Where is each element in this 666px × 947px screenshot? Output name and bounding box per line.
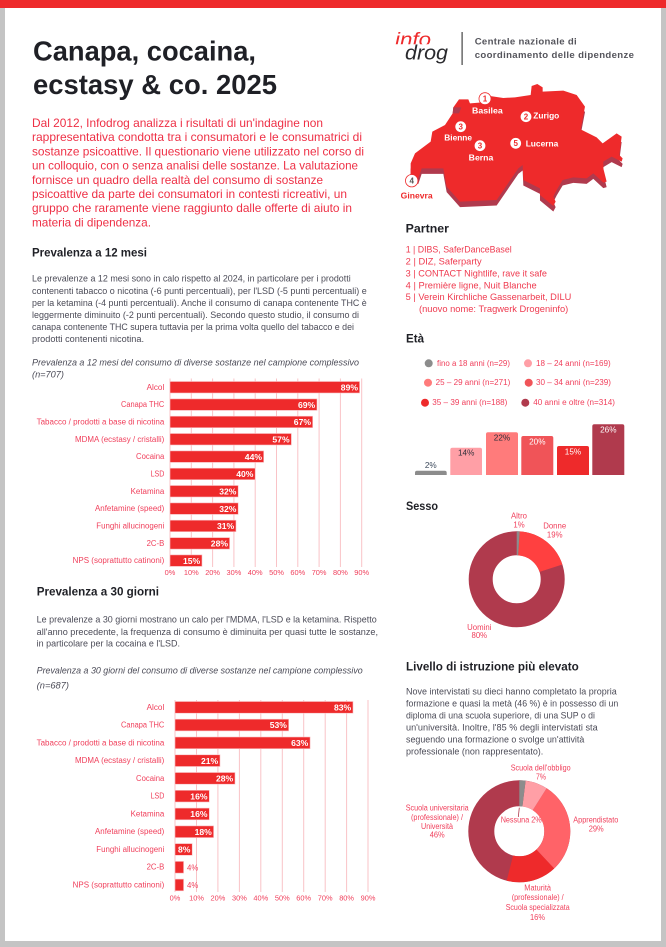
bar chart: 30 days: 16% (190, 809, 208, 819)
bar chart: 30 days: 80% (339, 894, 354, 903)
bar chart: 12 months: 28% (211, 539, 228, 549)
intro text: rappresentativa condotta tra i consumatori e le consumatrici di (32, 130, 362, 144)
donut chart: sex (467, 512, 566, 640)
bar chart: 30 days: 20% (211, 894, 226, 903)
bar chart: 12 months: MDMA (ecstasy / cristalli) (75, 435, 165, 444)
chart caption: 12 months: (n=707) (32, 370, 64, 380)
bar chart: 30 days: 2C-B (147, 863, 164, 872)
heading: Prevalenza a 12 mesi: Prevalenza a 12 mesi (32, 246, 147, 260)
donut chart: education: Scuola specializzata (506, 903, 570, 912)
bar chart: 30 days: 10% (189, 894, 204, 903)
text: education: formazione e quasi la metà (46 %) è in possesso di un (406, 699, 618, 709)
bar chart: 30 days: 53% (270, 720, 287, 730)
bar chart: 12 months: 40% (248, 568, 263, 577)
donut chart: education: 29% (589, 824, 604, 833)
bar chart: 12 months: 60% (290, 568, 306, 577)
bar chart: 30 days: 70% (318, 894, 333, 903)
bar chart: 12 months: 30% (227, 568, 242, 577)
logo: infodrog: drog (405, 42, 448, 64)
text: 12 month prevalence: contenenti tabacco o nicotina (-6 punti percentuali), per l'LSD (-5 punti percentuali) e (32, 286, 367, 296)
intro text: un colloquio, con o senza analisi delle sostanze. La valutazione (32, 159, 358, 173)
bar chart: 30 days: 63% (291, 738, 309, 748)
bar chart: 12 months: 15% (183, 556, 201, 566)
text: education: professionale (non rappresentato). (406, 747, 543, 757)
bar chart: 12 months: LSD (151, 470, 165, 478)
legend: age groups: fino a 18 anni (n=29) (437, 359, 510, 368)
donut chart: education: (professionale) / (512, 893, 564, 902)
legend: age groups: 35 – 39 anni (n=188) (432, 398, 508, 407)
text: 12 month prevalence: per la ketamina (-4 punti percentuali). Anche il consumo di canapa contenente THC è (32, 298, 367, 308)
bar chart: 12 months: 69% (298, 400, 316, 410)
bar chart: 12 months: NPS (soprattutto catinoni) (73, 556, 165, 565)
bar chart: age: 26% (600, 426, 616, 434)
bar chart: 12 months: 32% (219, 486, 237, 496)
list: partners: 1 | DIBS, SaferDanceBasel (406, 245, 512, 255)
bar chart: 30 days: 16% (190, 791, 208, 801)
bar chart: age: 20% (529, 438, 545, 446)
text: 30 day prevalence: Le prevalenze a 30 giorni mostrano un calo per l'MDMA, l'LSD e la ketamina. Rispetto (37, 615, 377, 625)
bar chart: 30 days: 30% (232, 894, 247, 903)
bar chart: 30 days: Canapa THC (121, 721, 165, 730)
bar chart: age (415, 424, 624, 475)
bar chart: 30 days: 50% (275, 894, 290, 903)
bar chart: 30 days: LSD (151, 792, 165, 801)
intro text: materia di dipendenza. (32, 215, 151, 229)
bar chart: 12 months: 89% (341, 382, 358, 392)
bar chart: 12 months: Ketamina (131, 487, 165, 496)
map: Switzerland: 3 (458, 123, 463, 132)
intro text: Dal 2012, Infodrog analizza i risultati di un'indagine non (32, 116, 323, 130)
donut chart: sex: 80% (471, 631, 487, 640)
donut chart: sex: Uomini (467, 623, 492, 632)
donut chart: education (406, 764, 619, 922)
donut chart: sex: Altro (511, 512, 528, 521)
donut chart: education: Scuola universitaria (406, 804, 469, 813)
bar chart: 12 months: 2C-B (147, 539, 164, 548)
bar chart: 30 days: 21% (201, 756, 219, 766)
heading: Sesso: Sesso (406, 499, 438, 513)
text: 12 month prevalence (32, 274, 367, 344)
map: Switzerland: Lucerna (526, 139, 559, 149)
text: education (406, 687, 618, 757)
text: 12 month prevalence: Le prevalenze a 12 mesi sono in calo rispetto al 2024, in particolare per i prodotti (32, 274, 351, 284)
list: partners: 2 | DIZ, Saferparty (406, 257, 482, 267)
bar chart: 30 days (37, 700, 376, 903)
bar chart: 12 months: Canapa THC (121, 400, 165, 409)
list: partners: (nuovo nome: Tragwerk Drogeninfo) (419, 304, 568, 314)
donut chart: education: Nessuna 2% (501, 816, 542, 825)
bar chart: 30 days: 90% (361, 894, 376, 903)
chart caption: 12 months: Prevalenza a 12 mesi del consumo di diverse sostanze nel campione complessivo (32, 358, 359, 368)
map: Switzerland: 3 (478, 142, 483, 151)
list: partners (406, 245, 571, 314)
text: 12 month prevalence: prodotti contenenti nicotina. (32, 334, 144, 344)
text: education: diploma di una scuola superiore, di una SUP o di (406, 711, 595, 721)
bar chart: 30 days: Anfetamine (speed) (95, 827, 165, 836)
map: Switzerland: Bienne (444, 133, 472, 143)
intro text: psicoattive da parte dei consumatori in contesti ricreativi, un (32, 187, 347, 201)
bar chart: age: 15% (565, 448, 581, 456)
text: education: un'università. Inoltre, l'85 % degli intervistati sta (406, 723, 598, 733)
heading: Prevalenza a 30 giorni: Prevalenza a 30 giorni (37, 585, 159, 599)
logo text: organisation name (475, 37, 634, 61)
map: Switzerland: 5 (513, 139, 518, 148)
text: 30 day prevalence: all'anno precedente, la frequenza di consumo è diminuita per quasi tutte le sostanze, (37, 627, 378, 637)
legend: age groups: 40 anni e oltre (n=314) (533, 398, 615, 407)
bar chart: 12 months: 70% (312, 568, 327, 577)
bar chart: 12 months: 44% (245, 452, 262, 462)
bar chart: 12 months: 31% (217, 521, 235, 531)
map: Switzerland: 4 (409, 177, 414, 186)
bar chart: 12 months: Alcol (147, 383, 165, 392)
intro text (32, 116, 364, 229)
list: partners: 3 | CONTACT Nightlife, rave it safe (406, 269, 547, 279)
title: ecstasy & co. 2025 (33, 69, 277, 100)
bar chart: 30 days: NPS (soprattutto catinoni) (73, 880, 165, 890)
legend: age groups: 18 – 24 anni (n=169) (536, 359, 611, 368)
bar chart: age: 22% (494, 434, 510, 442)
list: partners: 5 | Verein Kirchliche Gassenarbeit, DILU (406, 292, 571, 302)
text: 30 day prevalence: in particolare per la cocaina e l'LSD. (37, 639, 180, 649)
bar chart: 30 days: 4% (187, 863, 198, 872)
bar chart: 12 months: Funghi allucinogeni (96, 522, 165, 530)
logo: infodrog: info (395, 30, 431, 51)
map: Switzerland: Zurigo (533, 111, 559, 121)
logo text: organisation name: Centrale nazionale di (475, 37, 577, 48)
donut chart: sex: 1% (513, 520, 525, 529)
chart caption: 30 days (37, 665, 363, 690)
bar chart: 30 days: Cocaina (136, 774, 165, 783)
heading: Età: Età (406, 332, 424, 346)
chart caption: 30 days: Prevalenza a 30 giorni del consumo di diverse sostanze nel campione complessivo (37, 665, 363, 675)
text: 12 month prevalence: canapa contenente THC supera tuttavia per la prima volta quello del tabacco e dei (32, 322, 354, 332)
title: Canapa, cocaina, (33, 36, 256, 67)
donut chart: education: Scuola dell'obbligo (511, 764, 571, 773)
bar chart: 12 months: 50% (269, 568, 284, 577)
bar chart: 12 months: 20% (205, 568, 220, 577)
list: partners: 4 | Première ligne, Nuit Blanche (406, 281, 537, 291)
chart caption: 30 days: (n=687) (37, 680, 69, 690)
intro text: gruppo che raramente viene raggiunto dalle offerte di aiuto in (32, 201, 352, 215)
bar chart: 12 months: 67% (294, 417, 311, 427)
bar chart: 30 days: Alcol (147, 703, 165, 712)
bar chart: 30 days: 8% (178, 845, 191, 855)
logo: infodrog (395, 30, 463, 65)
bar chart: 30 days: 83% (334, 702, 352, 712)
bar chart: 12 months: Tabacco / prodotti a base di nicotina (37, 418, 165, 426)
bar chart: 12 months (37, 378, 370, 577)
heading: Partner: Partner (406, 222, 449, 236)
bar chart: 12 months: 40% (236, 469, 254, 479)
donut chart: education: 46% (430, 830, 445, 840)
bar chart: 12 months: 32% (219, 504, 237, 514)
chart caption: 12 months (32, 358, 359, 380)
text: education: Nove intervistati su dieci hanno completato la propria (406, 687, 617, 697)
bar chart: 30 days: 60% (296, 894, 312, 903)
bar chart: 12 months: Anfetamine (speed) (95, 504, 165, 513)
map: Switzerland (401, 84, 623, 211)
bar chart: 12 months: 90% (354, 568, 370, 577)
bar chart: 12 months: 80% (333, 568, 348, 577)
intro text: fornisce un quadro della realtà del consumo di sostanze (32, 173, 323, 187)
bar chart: 30 days: Ketamina (131, 809, 165, 818)
donut chart: education: Apprendistato (573, 816, 619, 825)
donut chart: sex: 19% (547, 531, 563, 540)
map: Switzerland: Ginevra (401, 192, 433, 201)
bar chart: 30 days: Tabacco / prodotti a base di nicotina (37, 738, 165, 747)
bar chart: 30 days: 40% (253, 894, 269, 903)
legend: age groups: 30 – 34 anni (n=239) (536, 378, 611, 387)
text: 12 month prevalence: leggermente diminuito (-2 punti percentuali). Secondo questo studio, il consumo di (32, 310, 359, 320)
bar chart: 30 days: 18% (195, 827, 212, 837)
heading: Livello di istruzione: Livello di istruzione più elevato (406, 659, 579, 673)
text: 30 day prevalence (37, 615, 378, 649)
intro text: sostanze psicoattive. Il questionario viene utilizzato nel corso di (32, 144, 364, 158)
donut chart: education: (professionale) / (411, 813, 464, 822)
bar chart: 12 months: 0% (165, 568, 176, 577)
map: Switzerland: Berna (469, 153, 494, 163)
map: Switzerland: 1 (483, 95, 488, 104)
map: Switzerland: Basilea (472, 105, 503, 115)
donut chart: sex: Donne (543, 522, 566, 531)
bar chart: age: 2% (425, 461, 437, 470)
donut chart: education: 7% (536, 772, 546, 781)
bar chart: 30 days: 4% (187, 881, 198, 890)
text: education: seguendo una formazione o svolge un'attività (406, 735, 584, 745)
donut chart: education: 16% (530, 913, 545, 922)
bar chart: 12 months: 10% (184, 568, 199, 577)
bar chart: 30 days: 0% (170, 894, 181, 903)
bar chart: 12 months: 57% (272, 434, 290, 444)
map: Switzerland: 2 (524, 113, 529, 122)
bar chart: 12 months: Cocaina (136, 452, 165, 461)
bar chart: age: 14% (458, 448, 474, 458)
title (33, 36, 277, 100)
donut chart: education: Maturità (524, 884, 552, 893)
bar chart: 30 days: MDMA (ecstasy / cristalli) (75, 756, 165, 765)
bar chart: 30 days: 28% (216, 774, 234, 784)
logo text: organisation name: coordinamento delle dipendenze (475, 50, 634, 61)
bar chart: 30 days: Funghi allucinogeni (96, 845, 165, 854)
donut chart: education: Università (421, 822, 454, 831)
legend: age groups (421, 359, 615, 407)
legend: age groups: 25 – 29 anni (n=271) (436, 378, 511, 387)
